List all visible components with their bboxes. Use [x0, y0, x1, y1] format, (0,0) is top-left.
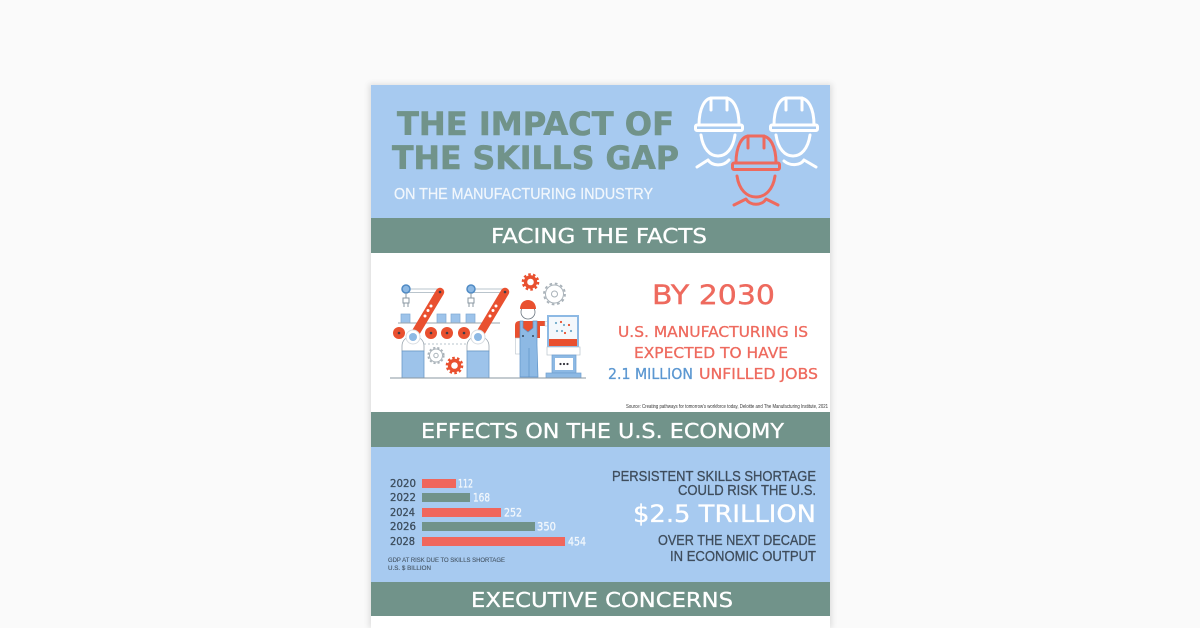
text block: unfilled jobs: 2.1 MILLION: [608, 365, 693, 383]
kiosk screen: [546, 316, 581, 378]
icon: white worker right: [770, 98, 818, 167]
section heading: effects on the economy: [371, 412, 830, 447]
text block: unfilled jobs: [608, 323, 818, 383]
bar values: 252: [504, 506, 522, 520]
bar values: 454: [568, 534, 586, 548]
text block: economic output: IN ECONOMIC OUTPUT: [670, 549, 816, 565]
year labels: 2022: [390, 492, 416, 504]
text block: unfilled jobs: EXPECTED TO HAVE: [634, 344, 788, 362]
red robot arm left: [406, 291, 441, 344]
worker figure: [515, 300, 558, 377]
text block: unfilled jobs: UNFILLED JOBS: [699, 365, 818, 383]
title: [392, 105, 679, 177]
stat: 2.5 trillion: $2.5 TRILLION: [633, 500, 816, 528]
chart caption: [388, 557, 506, 572]
illustration: factory: [390, 274, 586, 378]
bar values: 350: [537, 520, 556, 534]
chart caption: U.S. $ BILLION: [388, 565, 431, 572]
icon: white worker left: [696, 98, 742, 167]
year labels: 2024: [390, 507, 415, 519]
conveyor rollers: [393, 327, 470, 339]
column left: [402, 336, 424, 378]
title: THE IMPACT OF: [397, 105, 674, 143]
bar values: 112: [458, 476, 473, 490]
section heading: executive concerns: [371, 582, 830, 616]
year labels: [390, 478, 416, 548]
icon: red worker: [732, 136, 780, 205]
bar chart: GDP at risk: [390, 476, 586, 548]
text block: economic output: OVER THE NEXT DECADE: [658, 533, 816, 549]
red robot arm right: [471, 291, 506, 344]
overhead arm and gripper left: [402, 285, 440, 307]
year labels: 2020: [390, 478, 416, 490]
section heading: facing the facts: [371, 218, 830, 253]
panel: header: [371, 85, 830, 218]
text block: skills shortage: [612, 469, 816, 499]
icon: gear grey lower: [428, 348, 444, 363]
overhead arm and gripper right: [467, 285, 505, 307]
text block: economic output: [658, 533, 816, 565]
headline: by 2030: BY 2030: [652, 280, 775, 311]
conveyor boxes: [401, 314, 475, 323]
icon: gear grey upper: [544, 284, 565, 304]
icon: gear red lower: [447, 358, 462, 373]
year labels: 2028: [390, 536, 415, 548]
source note: Source: Creating pathways for tomorrow's workforce today, Deloitte and The Manufacturing Institute, 2021: [626, 404, 828, 410]
text block: unfilled jobs: U.S. MANUFACTURING IS: [618, 323, 808, 341]
icon: gear red upper: [523, 274, 538, 290]
section heading: executive concerns: EXECUTIVE CONCERNS: [471, 588, 733, 612]
panel: bottom white: [371, 616, 830, 628]
bar values: 168: [473, 490, 490, 504]
text block: skills shortage: COULD RISK THE U.S.: [678, 483, 816, 499]
panel: economy: [371, 447, 830, 582]
year labels: 2026: [390, 521, 416, 533]
text block: skills shortage: PERSISTENT SKILLS SHORTAGE: [612, 469, 816, 485]
section heading: effects on the economy: EFFECTS ON THE U.S. ECONOMY: [421, 419, 785, 443]
panel: facts: [371, 253, 830, 412]
title: THE SKILLS GAP: [392, 139, 679, 177]
bar values: [458, 476, 586, 548]
subtitle: ON THE MANUFACTURING INDUSTRY: [394, 186, 653, 203]
column right: [467, 336, 489, 378]
section heading: facing the facts: FACING THE FACTS: [491, 224, 707, 248]
bars: [422, 479, 565, 546]
chart caption: GDP AT RISK DUE TO SKILLS SHORTAGE: [388, 557, 506, 564]
